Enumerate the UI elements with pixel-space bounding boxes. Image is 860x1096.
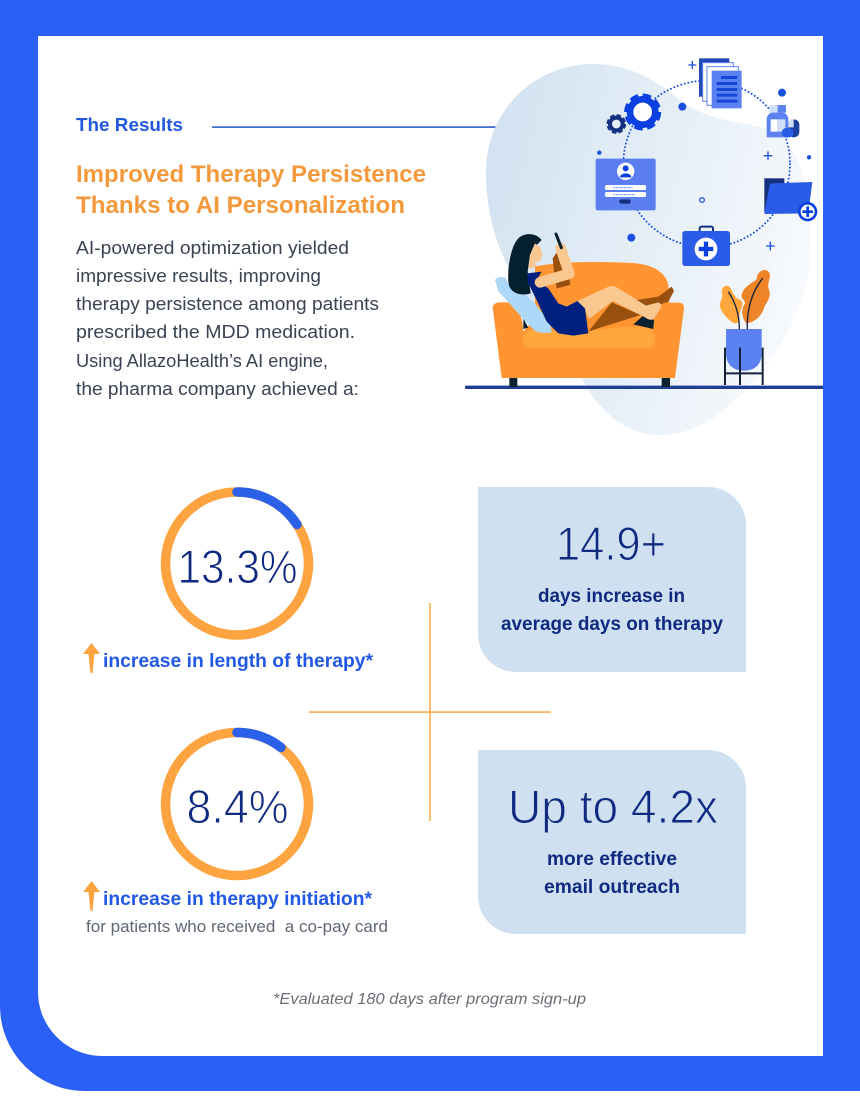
- stat card: 14.9+ days: average days on therapy: [501, 613, 723, 635]
- donut chart: 8.4%: [166, 732, 308, 876]
- orange cross divider: [309, 603, 551, 821]
- icon: folder with plus: [764, 178, 817, 221]
- stat card: 14.9+ days: 14.9+: [556, 517, 666, 570]
- icon: medical kit: [682, 227, 730, 266]
- icon: decorative dots and pluses: [597, 89, 811, 250]
- heading: Improved Therapy Persistence: [76, 161, 426, 188]
- sofa: [493, 262, 684, 387]
- intro text block: therapy persistence among patients: [76, 294, 379, 314]
- label: increase in therapy initiation: increase in therapy initiation*: [103, 888, 372, 910]
- background blob: [486, 64, 811, 435]
- intro text block: impressive results, improving: [76, 266, 321, 286]
- icon: documents: [688, 58, 742, 108]
- icon: up arrow: [83, 881, 100, 911]
- donut chart: 13.3%: [166, 492, 308, 635]
- icon ring: [596, 58, 817, 250]
- donut chart: 13.3%: 13.3%: [178, 540, 298, 593]
- donut chart: 8.4%: 8.4%: [186, 780, 288, 833]
- icon: medicine bottle: [767, 105, 799, 137]
- intro text block: AI-powered optimization yielded: [76, 238, 349, 258]
- intro text block: [76, 238, 379, 399]
- woman: [508, 234, 674, 336]
- icon: login form: [596, 159, 656, 210]
- intro text block: Using AllazoHealth’s AI engine,: [76, 351, 328, 371]
- stat card: 14.9+ days: [478, 487, 746, 672]
- heading: Thanks to AI Personalization: [76, 192, 405, 219]
- pillow: [495, 277, 552, 333]
- stat card: up to 4.2x: more effective: [547, 848, 677, 870]
- intro text block: prescribed the MDD medication.: [76, 322, 355, 342]
- potted plant: [720, 270, 770, 385]
- icon: gears: [607, 95, 660, 133]
- intro text block: the pharma company achieved a:: [76, 379, 359, 399]
- stat card: up to 4.2x: Up to 4.2x: [508, 780, 718, 833]
- floor line: [465, 386, 823, 389]
- heading: [76, 161, 426, 219]
- section label: The Results: The Results: [76, 114, 183, 135]
- icon: up arrow: [83, 643, 100, 673]
- stat card: up to 4.2x: email outreach: [544, 876, 680, 898]
- illustration: woman on sofa with health icons: [465, 58, 823, 435]
- label: co-pay card note: for patients who received a co-pay card: [86, 917, 388, 936]
- stat card: up to 4.2x: [478, 750, 746, 934]
- stat card: 14.9+ days: days increase in: [538, 585, 685, 607]
- label: increase in length of therapy: increase in length of therapy*: [103, 650, 373, 672]
- footnote: *Evaluated 180 days after program sign-up: [273, 991, 586, 1008]
